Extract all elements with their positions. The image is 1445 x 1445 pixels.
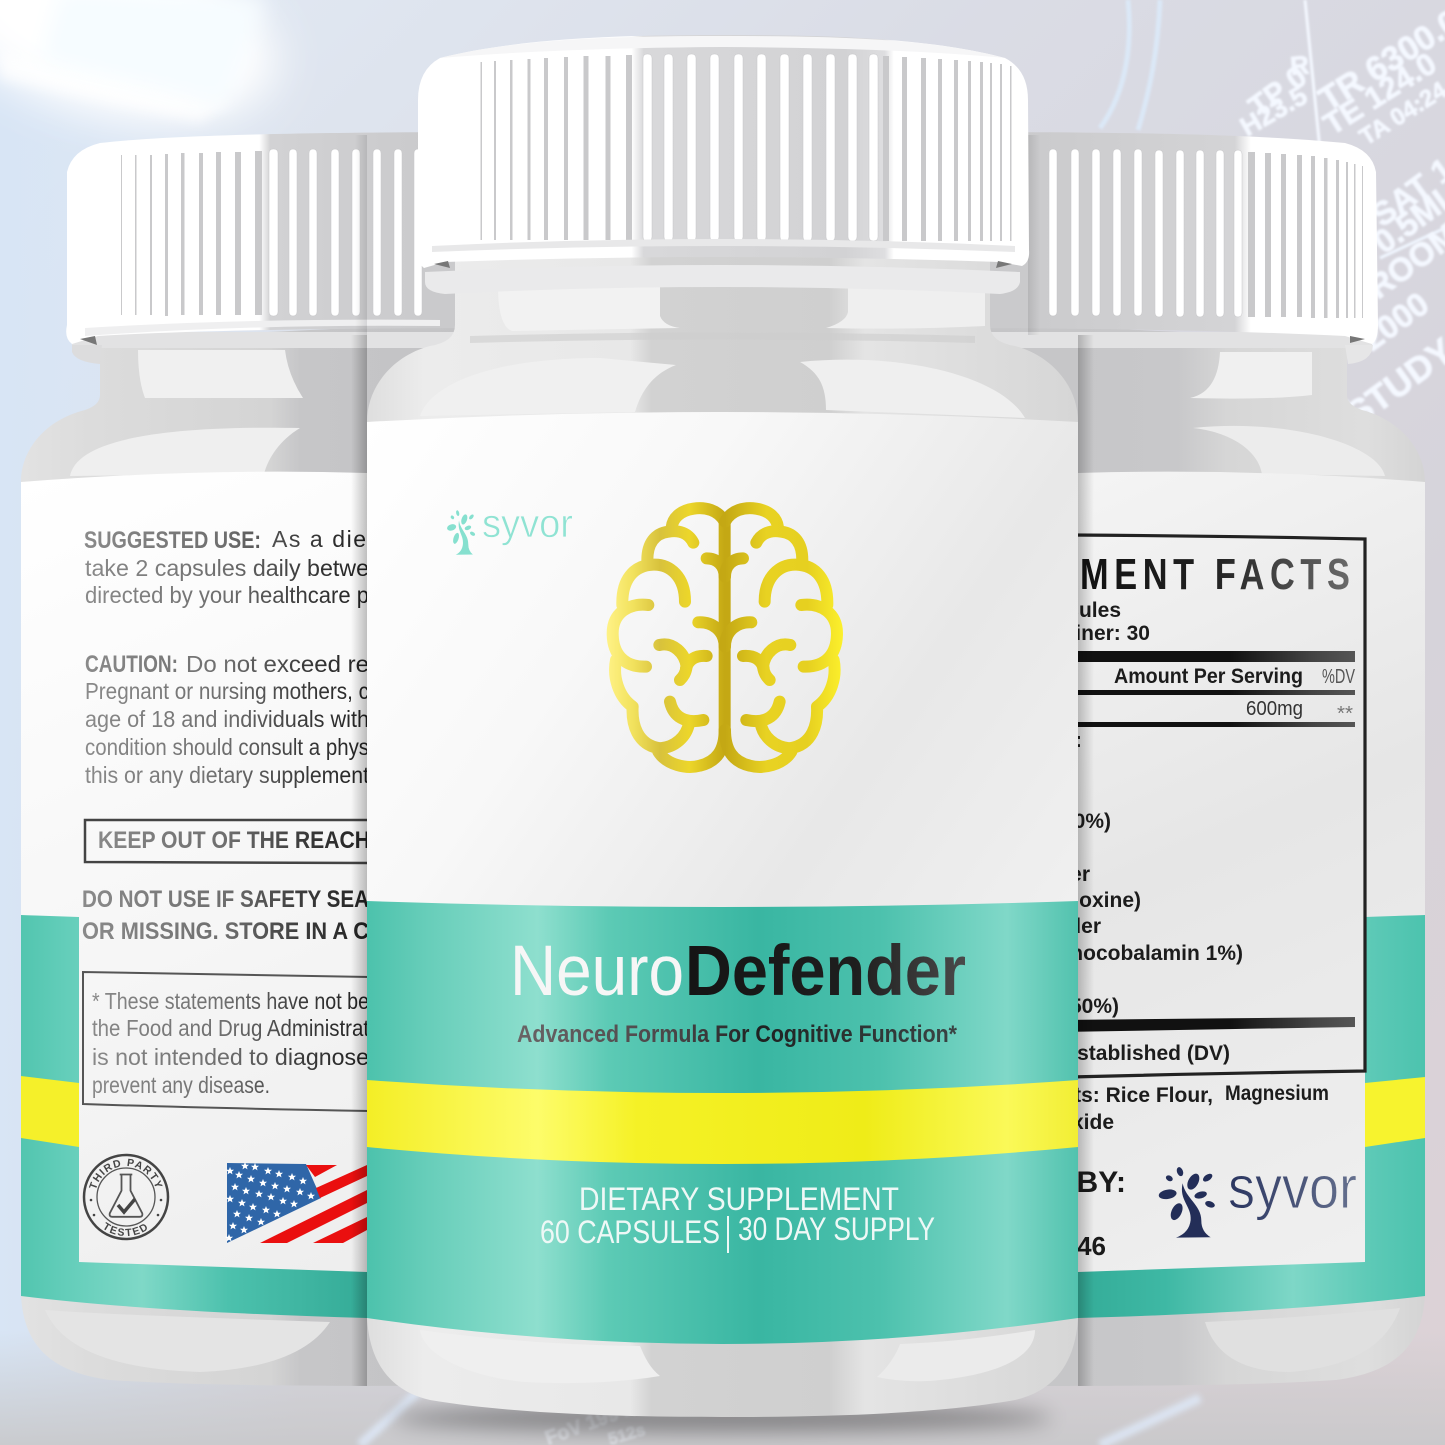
supplement facts box: established (DV) (1065, 1042, 1230, 1065)
supplement facts box: ** (1337, 703, 1353, 725)
icon: gold brain (613, 508, 837, 767)
right bottle (supplement facts) (930, 132, 1425, 1386)
left bottle (back label) (21, 132, 455, 1386)
supply text: DIETARY SUPPLEMENT (579, 1181, 899, 1217)
supplement facts box (1014, 535, 1365, 1077)
text: suggested use (84, 526, 375, 608)
background scan text: upper right: 2000 (1354, 285, 1436, 358)
safety warning (82, 886, 369, 945)
supplement facts box: %DV (1322, 666, 1355, 688)
center bottle shadow (351, 135, 1094, 1432)
disclaimer box: the Food and Drug Administrat (92, 1015, 370, 1041)
right bottle yellow band (1365, 1077, 1425, 1147)
right bottle shoulder highlights (930, 332, 1400, 1372)
right bottle body (930, 320, 1425, 1386)
supplement facts box: : (1075, 729, 1082, 752)
center neck right highlight (826, 285, 985, 329)
other ingredients: Oxide (1056, 1111, 1114, 1134)
other ingredients: Magnesium (1225, 1082, 1329, 1105)
text: suggested use: SUGGESTED USE: (84, 527, 261, 554)
center bottom left highlight (420, 1330, 660, 1383)
supplement facts box: Powder (1025, 915, 1101, 938)
text: caution: age of 18 and individuals with (85, 706, 369, 732)
left bottle cap (66, 132, 520, 345)
left bottle body (21, 320, 520, 1386)
disclaimer box: is not intended to diagnose (92, 1044, 369, 1070)
supplement facts box: Capsules (1028, 599, 1121, 622)
text: caution (85, 651, 370, 788)
text: suggested use: directed by your healthcare p (85, 582, 369, 608)
safety warning: OR MISSING. STORE IN A C (82, 918, 369, 945)
center neck highlight (498, 285, 680, 331)
center shoulder right highlight (800, 360, 1025, 418)
center white label (367, 412, 1078, 910)
other ingredients: Ingredients: Rice Flour, (980, 1084, 1213, 1107)
text: suggested use: take 2 capsules daily betwe (85, 555, 369, 581)
safety warning: DO NOT USE IF SAFETY SEA (82, 886, 369, 913)
text: caution: Pregnant or nursing mothers, c (85, 678, 369, 704)
left bottle yellow band (21, 1076, 79, 1147)
syvor navy logo (1158, 1154, 1357, 1238)
left bottle teal band (21, 915, 367, 1318)
supplement facts box: Powder (1014, 863, 1090, 886)
center teal band (367, 901, 1078, 1344)
text: caution: this or any dietary supplement (85, 762, 370, 788)
background scan text: upper right: H23.5 (1235, 80, 1312, 142)
center neck ring (425, 265, 1020, 294)
manufactured by: 46 (1077, 1231, 1106, 1261)
background scan text: upper right: TE 124.0 (1317, 46, 1442, 142)
manufactured by: BY: (1077, 1166, 1126, 1199)
syvor teal logo (447, 502, 573, 555)
product name: Neuro (510, 932, 684, 1011)
disclaimer box (83, 972, 370, 1111)
supplement facts box: 50%) (1070, 995, 1119, 1018)
supplement facts box: Container: 30 (1016, 622, 1150, 645)
left back panel (21, 472, 367, 1272)
syvor navy logo: syvor (1228, 1154, 1357, 1221)
disclaimer box: * These statements have not be (92, 988, 369, 1014)
supplement facts box: 0%) (1074, 810, 1111, 833)
tagline: Advanced Formula For Cognitive Function* (517, 1021, 958, 1048)
manufactured by (1077, 1166, 1126, 1261)
background scan text: upper right: R (1289, 49, 1310, 81)
center cap (418, 35, 1029, 268)
text: caution: CAUTION: (85, 651, 178, 678)
disclaimer box: prevent any disease. (92, 1072, 270, 1098)
background scan text: upper right: TP 0 (1243, 60, 1313, 124)
text: caution: Do not exceed re (186, 651, 369, 677)
icon: american flag (225, 1162, 367, 1243)
center bottom right highlight (877, 1330, 1035, 1381)
right bottle teal band (1078, 915, 1425, 1318)
center neck ridge (470, 332, 975, 343)
product name (510, 932, 966, 1011)
text: suggested use: As a diet (272, 526, 375, 552)
supplement facts box: (Pyridoxine) (1020, 889, 1141, 912)
background scan text: upper right (1235, 2, 1445, 434)
center bottle (367, 35, 1078, 1417)
left bottle shoulder highlights (45, 332, 520, 1372)
syvor teal logo: syvor (482, 502, 573, 546)
keep out of reach box (85, 820, 370, 863)
keep out of reach box: KEEP OUT OF THE REACH (98, 827, 370, 854)
other ingredients (980, 1082, 1329, 1134)
right bottle cap (930, 132, 1378, 344)
supply text: 30 DAY SUPPLY (738, 1211, 935, 1247)
supplement facts box: Amount Per Serving (1114, 665, 1303, 688)
center yellow band (367, 1080, 1078, 1164)
product name: Defender (685, 932, 966, 1011)
center shoulder left highlight (420, 358, 676, 416)
icon: third party tested seal: TESTED (104, 1222, 147, 1236)
icon: third party tested seal: THIRD PARTY (88, 1158, 163, 1188)
text: caution: condition should consult a phys (85, 734, 369, 760)
right back panel (1078, 472, 1425, 1272)
icon: third party tested seal (82, 1154, 170, 1240)
supplement facts box: MENT FACTS (1080, 550, 1350, 599)
center bottle body (367, 245, 1078, 1417)
supply text (540, 1181, 935, 1253)
supplement facts box: (Cyanocobalamin 1%) (1025, 942, 1243, 965)
supply text: 60 CAPSULES (540, 1214, 720, 1250)
supplement facts box: 600mg (1246, 698, 1303, 720)
